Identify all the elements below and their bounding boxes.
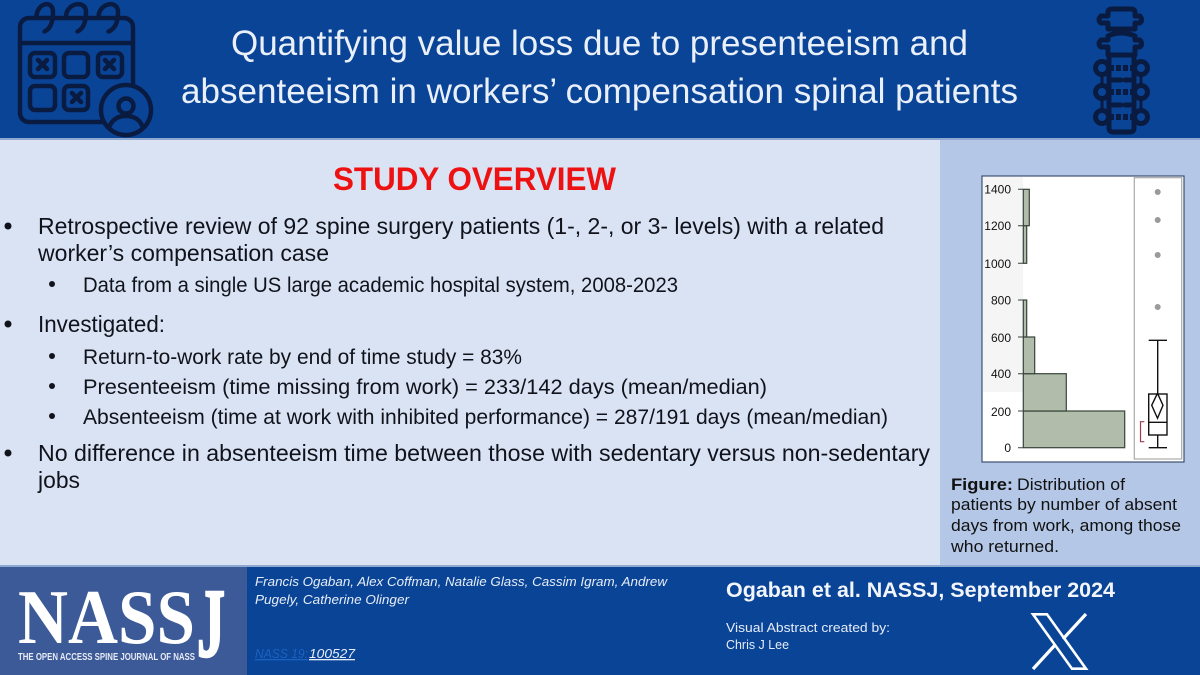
visual abstract credit: Chris J Lee [726,637,789,652]
citation heading: Ogaban et al. NASSJ, September 2024 [726,579,1115,602]
authors: Francis Ogaban, Alex Coffman, Natalie Glass, Cassim Igram, Andrew [255,574,669,589]
authors: Pugely, Catherine Olinger [255,592,410,607]
bullet: investigated: Investigated: [38,311,165,337]
axis labels: 200 [991,405,1011,419]
sub-bullets: investigated measures: Presenteeism (time missing from work) = 233/142 days (mean/median) [83,376,767,399]
citation link: NASS 19: [255,646,308,661]
box plot [1134,178,1182,459]
figure caption: days from work, among those [951,517,1181,535]
citation link [255,646,356,661]
figure caption: who returned. [950,538,1059,556]
text block: study overview bullets [4,213,930,493]
axis labels: 0 [1004,441,1011,455]
sub-bullets: investigated measures: Absenteeism (time at work with inhibited performance) = 287/191 days (mean/median) [83,406,888,429]
authors [255,574,669,607]
figure caption [950,476,1181,556]
sub-bullets: investigated measures [49,346,888,429]
chart: distribution of absent days [982,176,1184,462]
figure caption: Distribution of [1017,476,1125,494]
citation link: 100527 [309,646,356,661]
sub-bullet: data source: Data from a single US large academic hospital system, 2008-2023 [83,274,678,297]
bullet: no difference: jobs [37,467,80,493]
axis labels: 1400 [984,182,1011,196]
title: Quantifying value loss due to presenteeism and [231,24,968,63]
icon: X logo [1033,614,1086,669]
figure caption: patients by number of absent [951,496,1177,514]
panel: main study overview background [0,140,940,567]
visual abstract credit: Visual Abstract created by: [726,620,890,635]
panel: figure sidebar background [940,140,1200,567]
bullet: retrospective review: Retrospective review of 92 spine surgery patients (1-, 2-, or 3- levels) with a related [38,213,884,239]
panel: footer band [0,565,1200,675]
histogram bars [1023,189,1125,448]
bullet: no difference: No difference in absenteeism time between those with sedentary versus non-sedentary [38,440,930,466]
logo: NASSJ [0,567,247,675]
axis labels: 800 [991,294,1011,308]
bullet: retrospective review [4,213,884,266]
axis labels: 600 [991,331,1011,345]
axis labels [984,182,1011,455]
title [181,24,1018,111]
axis ticks [1018,189,1023,448]
figure caption: Figure: [951,476,1013,494]
icon: spine with hardware [1096,9,1148,132]
logo: NASSJ: THE OPEN ACCESS SPINE JOURNAL OF NASS [18,652,195,663]
panel: header band [0,0,1200,140]
heading: study overview: STUDY OVERVIEW [333,161,617,197]
visual abstract credit [726,620,890,652]
logo: NASSJ: NASS [18,574,195,660]
bullet: no difference [4,440,930,493]
title: absenteeism in workers’ compensation spinal patients [181,72,1018,111]
logo: NASSJ: J [197,570,225,675]
axis labels: 400 [991,367,1011,381]
axis labels: 1200 [984,219,1011,233]
icon: calendar with person [20,4,151,135]
bullet: retrospective review: worker’s compensation case [37,240,329,266]
sub-bullets: investigated measures: Return-to-work rate by end of time study = 83% [83,346,522,369]
axis labels: 1000 [984,257,1011,271]
